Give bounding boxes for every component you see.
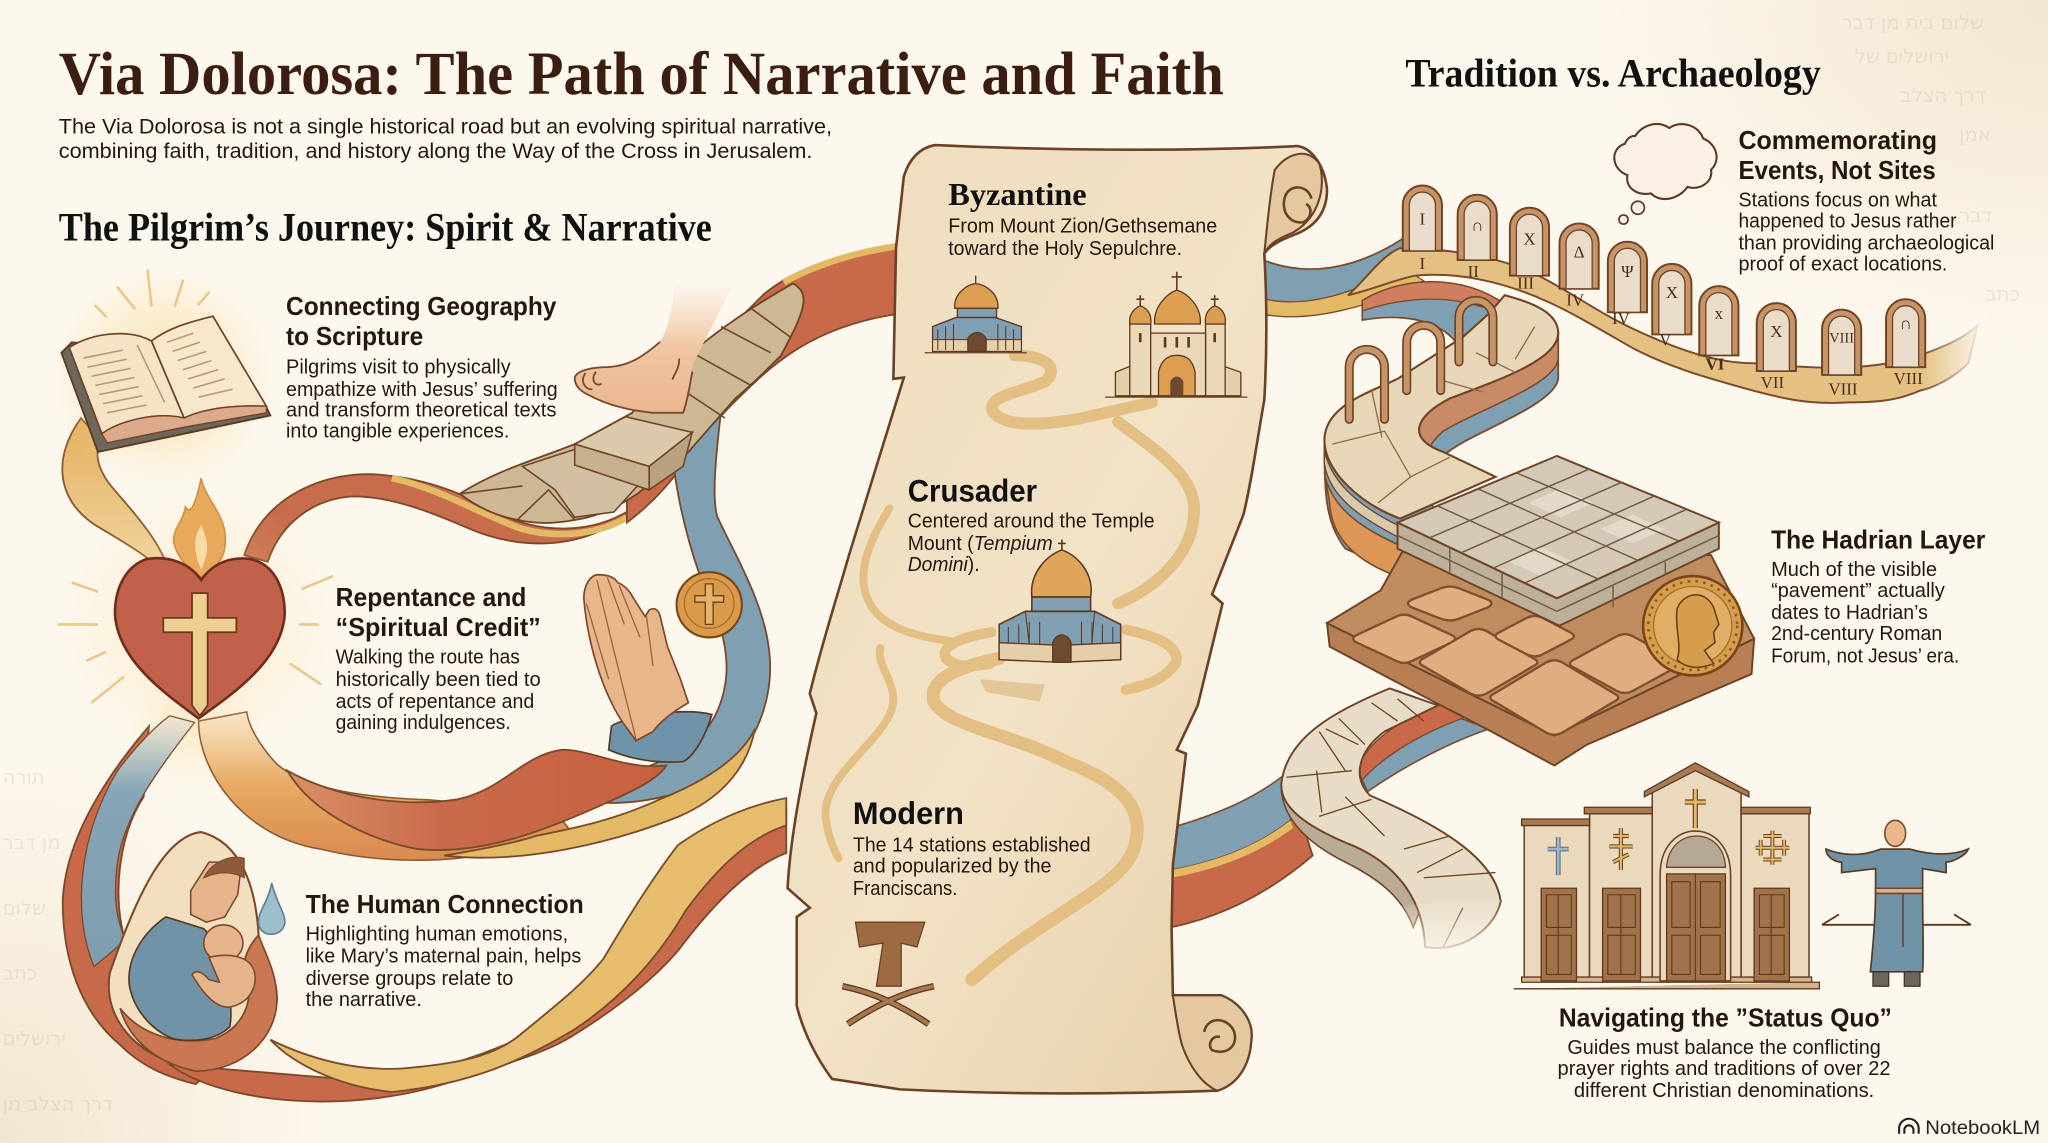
text block: connecting geography: to Scripture — [286, 321, 423, 351]
background: דרך הצלב — [1900, 84, 1986, 107]
ribbons: left pilgrim path — [62, 246, 901, 1102]
text block: repentance — [336, 582, 541, 734]
text block: human connection: diverse groups relate to — [306, 968, 513, 990]
text block: commemorating events: happened to Jesus rather — [1738, 210, 1957, 232]
foot icon — [575, 281, 731, 413]
background: ירושלים — [3, 1027, 66, 1050]
scroll text: crusader — [908, 474, 1155, 576]
station arches I to VIII — [1403, 186, 1925, 375]
text block: hadrian layer: The Hadrian Layer — [1771, 525, 1985, 555]
symbols inside arches: X — [1666, 283, 1678, 302]
background: אמן — [1959, 123, 1991, 146]
text block: status quo: prayer rights and traditions of over 22 — [1558, 1058, 1891, 1080]
open book icon — [52, 268, 274, 490]
heading: tradition vs archaeology: Tradition vs. Archaeology — [1405, 50, 1821, 95]
text block: human connection — [306, 889, 584, 1011]
tau cross — [856, 922, 925, 986]
symbols inside arches: ∩ — [1899, 314, 1912, 333]
text block: repentance: “Spiritual Credit” — [336, 612, 541, 642]
roman numerals along road: VI — [1706, 355, 1725, 374]
symbols inside arches: x — [1715, 304, 1724, 323]
text block: human connection: Highlighting human emotions, — [306, 923, 568, 945]
scroll text: modern: and popularized by the — [853, 856, 1051, 878]
roman numerals along road: V — [1659, 330, 1672, 349]
roman numerals along road: IV — [1612, 309, 1631, 328]
text block: commemorating events — [1738, 125, 1994, 275]
text block: hadrian layer: 2nd-century Roman — [1771, 623, 1942, 645]
arches on lower walkway — [1349, 300, 1493, 419]
coin with cross — [677, 572, 742, 637]
text block: hadrian layer: dates to Hadrian’s — [1771, 602, 1928, 624]
text block: human connection: the narrative. — [306, 989, 422, 1011]
icon: tear drop — [259, 883, 285, 934]
text block: commemorating events: Commemorating — [1738, 125, 1937, 155]
text block: status quo: different Christian denominations. — [1574, 1080, 1874, 1102]
gold road with station arches — [1348, 186, 1985, 408]
symbols inside arches: X — [1770, 322, 1782, 341]
text block: hadrian layer — [1771, 525, 1985, 667]
heading: pilgrim's journey: The Pilgrim’s Journey: Spirit & Narrative — [59, 204, 712, 249]
background: כתב — [3, 962, 37, 985]
scroll text: crusader: Mount (Tempium — [908, 533, 1053, 555]
text block: human connection: like Mary’s maternal pain, helps — [306, 946, 581, 968]
text block: status quo: Guides must balance the conflicting — [1567, 1037, 1881, 1059]
crossed swords — [842, 986, 934, 1024]
background: תורה — [3, 766, 45, 789]
scroll text: crusader: Crusader — [908, 474, 1037, 509]
notebooklm logo: NotebookLM — [1925, 1117, 2040, 1139]
text block: commemorating events: Stations focus on what — [1738, 189, 1937, 211]
church with multiple denominations — [1514, 763, 1819, 989]
text block: repentance: Walking the route has — [336, 647, 520, 669]
praying hands icon — [584, 575, 712, 762]
intro text: combining faith, tradition, and history along the Way of the Cross in Jerusalem. — [59, 138, 812, 163]
roman numerals along road: III — [1517, 274, 1534, 293]
dome building: byzantine left — [925, 276, 1027, 353]
heart icon with cross and flame — [57, 478, 337, 764]
background: מן דבר — [3, 831, 61, 854]
title: Via Dolorosa: The Path of Narrative and Faith — [59, 40, 1224, 108]
text block: connecting geography: empathize with Jesus’ suffering — [286, 379, 558, 401]
text block: status quo — [1558, 1003, 1892, 1102]
scroll text: crusader: Centered around the Temple — [908, 511, 1155, 533]
symbols inside arches: ∩ — [1471, 216, 1483, 235]
symbols inside arches: Δ — [1574, 242, 1585, 261]
intro text: The Via Dolorosa is not a single historical road but an evolving spiritual narrative, — [59, 113, 832, 138]
background: כתב — [1985, 282, 2020, 305]
scroll text: byzantine: toward the Holy Sepulchre. — [948, 238, 1182, 260]
roman numerals along road — [1420, 254, 1923, 399]
panel: central parchment scroll — [788, 145, 1327, 1093]
text block: commemorating events: Events, Not Sites — [1738, 155, 1936, 185]
scroll text: crusader: Domini). — [908, 554, 980, 576]
text block: connecting geography: and transform theoretical texts — [286, 400, 556, 422]
scroll text: modern — [853, 796, 1091, 900]
scroll text: modern: The 14 stations established — [853, 835, 1091, 857]
roman numerals along road: IV — [1566, 291, 1585, 310]
background: דרך הצלב מן — [3, 1092, 113, 1115]
background: ירושלים של — [1855, 45, 1949, 68]
guide figure with balance arrow — [1822, 820, 1971, 986]
brick platform: jesus-era layer — [1327, 549, 1754, 765]
grey hadrian paving slab — [1398, 456, 1719, 626]
text block: hadrian layer: “pavement” actually — [1771, 580, 1946, 602]
scroll sheet — [788, 145, 1327, 1093]
roman numerals along road: VIII — [1828, 380, 1858, 399]
roman numerals along road: VIII — [1894, 369, 1923, 388]
symbols inside arches — [1420, 210, 1912, 346]
text block: connecting geography — [286, 291, 558, 443]
text block: repentance: gaining indulgences. — [336, 712, 511, 734]
dome of the rock: crusader — [999, 540, 1121, 662]
text block: commemorating events: proof of exact locations. — [1738, 253, 1947, 275]
roman numerals along road: VII — [1761, 373, 1785, 392]
roman coin of hadrian — [1643, 576, 1742, 675]
text block: repentance: historically been tied to — [336, 669, 541, 691]
intro text — [59, 113, 832, 163]
text block: connecting geography: into tangible experiences. — [286, 421, 509, 443]
text block: repentance: Repentance and — [336, 582, 526, 612]
text block: connecting geography: Connecting Geography — [286, 291, 557, 321]
symbols inside arches: I — [1420, 210, 1426, 229]
ribbons: right bands from scroll — [1156, 238, 1424, 930]
thought cloud — [1614, 124, 1717, 224]
scroll text: modern: Franciscans. — [853, 878, 957, 900]
roman numerals along road: I — [1420, 254, 1426, 273]
text block: hadrian layer: Much of the visible — [1771, 559, 1937, 581]
background: דבר — [1959, 204, 1993, 227]
symbols inside arches: Ψ — [1621, 262, 1634, 281]
scroll text: byzantine: From Mount Zion/Gethsemane — [948, 216, 1217, 238]
text block: hadrian layer: Forum, not Jesus’ era. — [1771, 645, 1959, 667]
symbols inside arches: VIII — [1829, 330, 1854, 346]
text block: commemorating events: than providing archaeological — [1738, 233, 1994, 255]
route lines on scroll — [825, 355, 1194, 980]
text block: repentance: acts of repentance and — [336, 691, 534, 713]
lower winding stone road — [1281, 688, 1509, 964]
scroll text: byzantine — [948, 177, 1217, 260]
background: שלום בית מן דבר — [1842, 11, 1984, 34]
stone path with foot — [460, 281, 804, 523]
background: שלום — [3, 896, 46, 919]
text block: human connection: The Human Connection — [306, 889, 584, 919]
scroll text: byzantine: Byzantine — [948, 177, 1087, 212]
text block: status quo: Navigating the ”Status Quo” — [1559, 1003, 1892, 1033]
layered stone walkway — [1324, 282, 1558, 588]
Mary and child icon — [109, 832, 277, 1071]
text block: connecting geography: Pilgrims visit to physically — [286, 357, 512, 379]
church: byzantine right — [1105, 272, 1247, 397]
roman numerals along road: II — [1468, 262, 1479, 281]
symbols inside arches: X — [1523, 229, 1536, 248]
scroll text: modern: Modern — [853, 796, 964, 831]
